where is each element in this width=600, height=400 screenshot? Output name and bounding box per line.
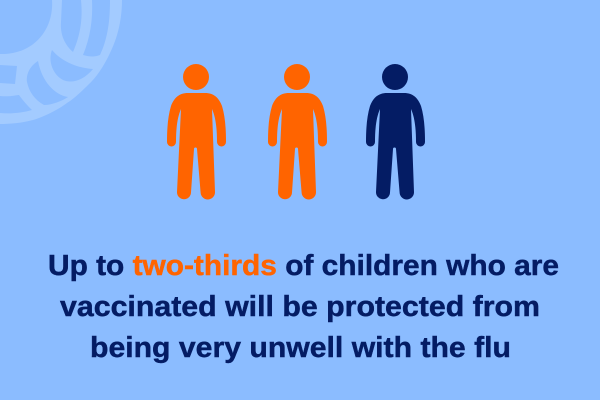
text block: main statement: vaccinated will be protected from: [60, 291, 540, 323]
text block: main statement: [48, 250, 559, 364]
icon: navy person: [366, 64, 425, 199]
icon: orange person 2: [268, 64, 327, 199]
icon: orange person 1: [167, 64, 226, 199]
text block: main statement: Up to two-thirds of children who are: [48, 250, 559, 282]
text block: main statement: being very unwell with the flu: [90, 332, 511, 364]
icon: decorative logo swirl: [0, 0, 122, 124]
